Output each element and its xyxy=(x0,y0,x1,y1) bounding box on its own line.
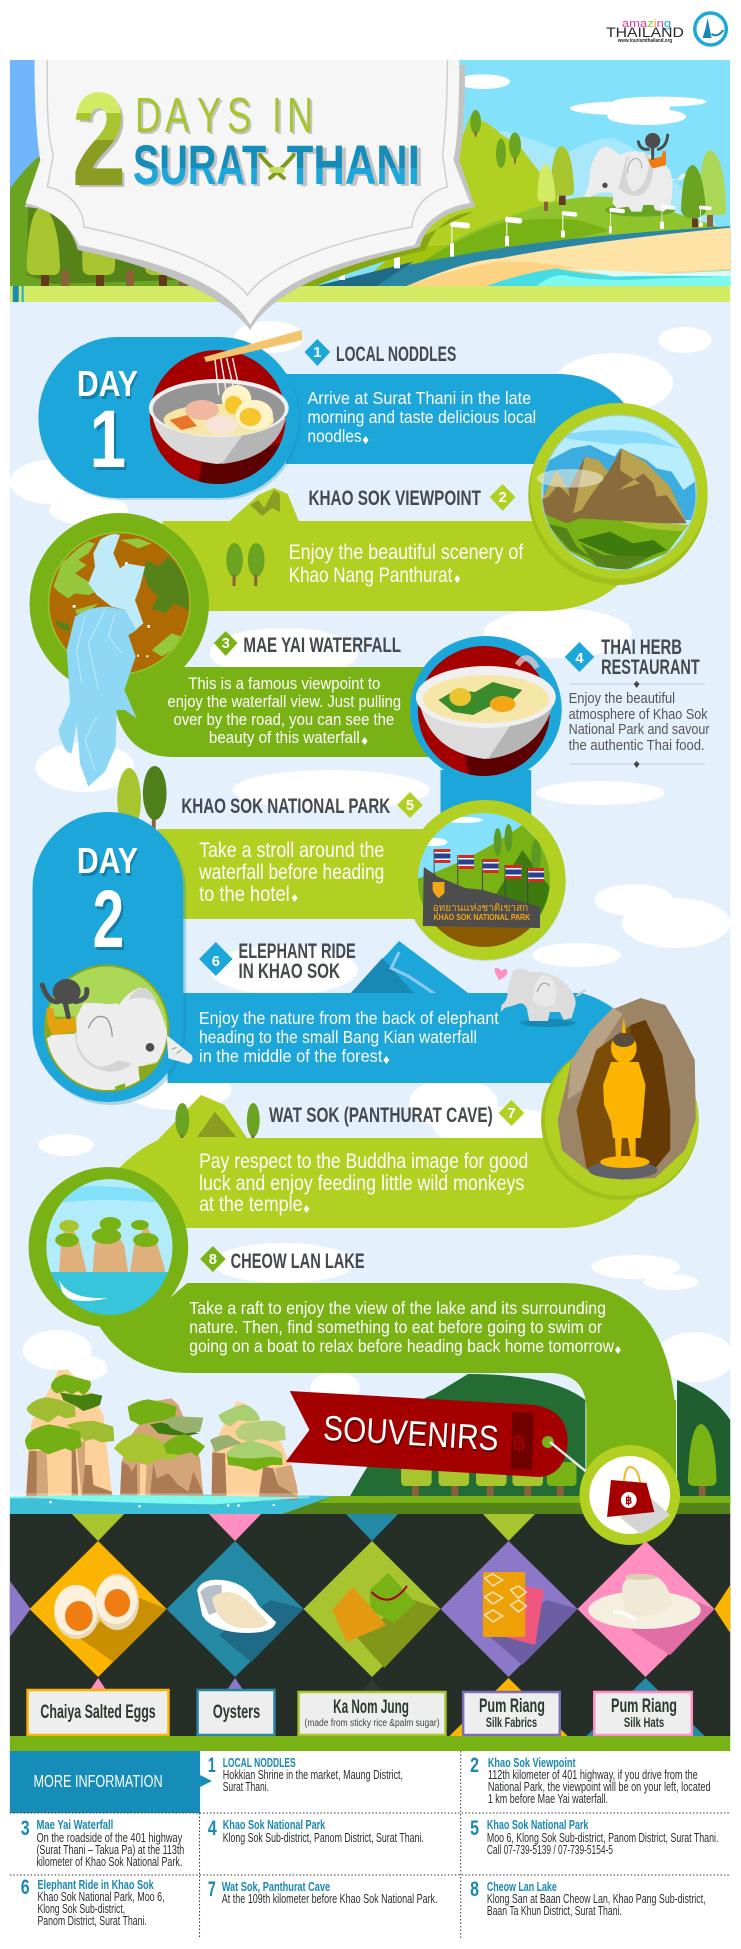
body text 2: Khao Nang Panthurat xyxy=(289,564,453,587)
panel: day 2: DAY xyxy=(80,844,139,884)
panel: day 1 xyxy=(38,337,301,500)
icon: trees above day 2 xyxy=(117,766,167,833)
label: chaiya salted eggs xyxy=(28,1690,169,1735)
haze and surf xyxy=(10,1493,310,1498)
souvenir: pum riang silk hats xyxy=(578,1541,714,1677)
body text 5 xyxy=(198,839,384,906)
body text 2: Enjoy the beautiful scenery of xyxy=(289,541,523,564)
trees xyxy=(470,110,726,227)
info 6: Klong Sok Sub-district, xyxy=(37,1902,125,1916)
logo: amazing thailand: THAILAND xyxy=(606,24,684,40)
buddha statue xyxy=(600,1017,649,1168)
lime hill xyxy=(424,116,559,246)
panel: day 1: DAY xyxy=(77,364,138,404)
label: silk fabrics xyxy=(463,1692,560,1735)
logo: amazing thailand xyxy=(606,18,684,44)
info 5: Khao Sok National Park xyxy=(487,1817,589,1832)
body text 7: luck and enjoy feeding little wild monkeys xyxy=(199,1172,524,1195)
label: ka nom jung: (made from sticky rice &palm sugar) xyxy=(305,1718,440,1729)
logo: round seal xyxy=(695,13,726,45)
label: silk fabrics: Silk Fabrics xyxy=(486,1714,537,1730)
shield title panel xyxy=(25,60,475,330)
info 7: At the 109th kilometer before Khao Sok National Park. xyxy=(222,1892,438,1906)
info grid lines xyxy=(10,1751,730,1938)
label: oysters: Oysters xyxy=(213,1701,260,1722)
label: ka nom jung xyxy=(299,1692,445,1735)
title: 2 days in surat thani: SURAT xyxy=(136,136,269,198)
info 8 xyxy=(470,1878,706,1918)
panel: day 1: 1 xyxy=(90,393,126,485)
icon: shopping bag circle xyxy=(579,1445,680,1545)
panel: day 1: DAY xyxy=(80,367,139,407)
info 3: Mae Yai Waterfall xyxy=(36,1817,113,1832)
body text 5: to the hotel xyxy=(199,883,290,906)
souvenir: oysters xyxy=(167,1541,304,1677)
body text 6: in the middle of the forest xyxy=(199,1046,382,1066)
icon: waterfall circle xyxy=(30,513,209,787)
label: silk fabrics: Pum Riang xyxy=(479,1695,545,1716)
title: 2 days in surat thani: THANI xyxy=(291,136,424,198)
body text 4: atmosphere of Khao Sok xyxy=(569,707,708,723)
info 2: 1 km before Mae Yai waterfall. xyxy=(488,1792,608,1806)
info 7: 7 xyxy=(208,1878,216,1901)
panel: day 2: 2 xyxy=(95,876,126,968)
more information heading xyxy=(10,1751,212,1813)
body text 8: nature. Then, find something to eat before going to swim or xyxy=(189,1317,602,1337)
icon: crossed swords xyxy=(260,155,294,178)
panel: day 2 xyxy=(33,812,186,1105)
heading 4: THAI HERB xyxy=(601,636,682,659)
icon: national park sign circle: KHAO SOK NATIONAL PARK xyxy=(434,912,530,922)
info 3: (Surat Thani – Takua Pa) at the 113th xyxy=(36,1843,184,1857)
info 4: Klong Sok Sub-district, Panom District, Surat Thani. xyxy=(223,1831,424,1845)
body text 4 xyxy=(569,681,710,768)
page background xyxy=(10,302,730,1514)
info 5 xyxy=(470,1817,718,1857)
info 8: 8 xyxy=(470,1878,479,1901)
body text 3: beauty of this waterfall xyxy=(209,728,360,747)
heading 4: RESTAURANT xyxy=(601,656,700,679)
clouds in sky xyxy=(457,74,707,125)
icon: noodle bowl xyxy=(149,330,303,500)
info 5: 5 xyxy=(470,1817,479,1840)
heading 2: 2 xyxy=(498,490,507,506)
info 1: 1 xyxy=(208,1754,216,1777)
info 3: kilometer of Khao Sok National Park. xyxy=(36,1855,182,1869)
heading 3: 3 xyxy=(222,636,230,652)
band: khao sok national park xyxy=(158,829,453,919)
info 7: Wat Sok, Panthurat Cave xyxy=(222,1879,330,1894)
panel: day 2: DAY xyxy=(77,841,138,881)
band: wat sok xyxy=(108,1095,646,1228)
info 6: 6 xyxy=(21,1876,30,1899)
band under header xyxy=(10,286,730,302)
icon: limestone rocks xyxy=(10,1370,310,1507)
body text 6: heading to the small Bang Kian waterfall xyxy=(199,1027,477,1047)
label: chaiya salted eggs: Chaiya Salted Eggs xyxy=(40,1701,156,1722)
band: mae yai waterfall xyxy=(113,667,463,757)
label: silk hats xyxy=(594,1692,692,1735)
heading 1: LOCAL NODDLES xyxy=(336,343,456,366)
panel: day 1: 1 xyxy=(93,396,128,488)
body text 6 xyxy=(199,1008,499,1066)
souvenirs panel background xyxy=(10,1514,730,1736)
label: silk hats: Silk Hats xyxy=(624,1714,664,1730)
souvenirs tag: ฿ xyxy=(512,1430,526,1455)
info 7 xyxy=(208,1878,438,1906)
heading 5: KHAO SOK NATIONAL PARK xyxy=(181,795,390,818)
icon: national park sign circle: อุทยานแห่งชาติเขาสก xyxy=(433,903,528,914)
right landscape xyxy=(316,74,733,300)
footer green band xyxy=(10,1736,730,1751)
body text 7: at the temple xyxy=(199,1193,303,1216)
body text 4: National Park and savour xyxy=(569,722,710,738)
icon: two trees xyxy=(226,543,265,586)
info 3 xyxy=(21,1817,184,1869)
title: 2 days in surat thani: 2 xyxy=(76,70,128,215)
body text 3: enjoy the waterfall view. Just pulling xyxy=(168,692,401,711)
body text 7: Pay respect to the Buddha image for good xyxy=(199,1150,528,1173)
body text 7 xyxy=(199,1150,528,1216)
info 2: 2 xyxy=(470,1754,479,1777)
icon: small elephant and heart xyxy=(495,968,585,1027)
souvenir: ka nom jung xyxy=(304,1541,441,1677)
info 1: Hokkian Shrine in the market, Maung District, xyxy=(223,1768,403,1782)
mid green hill xyxy=(422,196,730,277)
left landscape xyxy=(10,60,190,286)
rock 1 xyxy=(25,1370,114,1498)
logo: amazing thailand: ama zing xyxy=(622,18,671,30)
souvenirs tag: SOUVENIRS xyxy=(322,1409,500,1459)
icon: mountain circle xyxy=(528,403,708,585)
band: local noodles xyxy=(286,374,624,464)
ground xyxy=(279,1496,730,1515)
info 3: On the roadside of the 401 highway xyxy=(36,1831,183,1845)
heading 8: CHEOW LAN LAKE xyxy=(231,1250,365,1273)
souvenir: pum riang silk fabrics xyxy=(441,1541,578,1677)
body text 8 xyxy=(189,1298,621,1356)
body text 3: This is a famous viewpoint to xyxy=(188,674,380,693)
heading 2: KHAO SOK VIEWPOINT xyxy=(308,487,481,510)
heading 4 xyxy=(565,636,700,679)
info 1: LOCAL NODDLES xyxy=(223,1755,296,1770)
connector: blue column xyxy=(441,770,531,830)
info 2 xyxy=(470,1754,711,1806)
body text 8: Take a raft to enjoy the view of the lake and its surrounding xyxy=(189,1298,606,1318)
logo: amazing thailand: www.tourismthailand.org xyxy=(617,38,672,44)
heading 1 xyxy=(305,339,456,366)
label: oysters xyxy=(198,1690,274,1735)
body text 1 xyxy=(307,388,536,446)
panel: day 2: 2 xyxy=(93,873,124,965)
info 1: Surat Thani. xyxy=(223,1780,269,1794)
body text 3: over by the road, you can see the xyxy=(173,710,394,729)
body text 4: the authentic Thai food. xyxy=(569,738,705,754)
icon: cave and buddha circle xyxy=(541,998,699,1200)
souvenir: chaiya salted eggs xyxy=(30,1541,167,1677)
info 6: Panom District, Surat Thani. xyxy=(37,1914,147,1928)
rock 2 xyxy=(114,1398,205,1498)
heading 1: 1 xyxy=(313,345,321,361)
body text 5: waterfall before heading xyxy=(198,861,384,884)
heading 4: 4 xyxy=(575,651,584,667)
title: 2 days in surat thani: SURAT xyxy=(133,134,266,196)
heading 7: 7 xyxy=(507,1106,516,1122)
icon: shopping bag circle: ฿ xyxy=(625,1495,632,1507)
decorative triangles xyxy=(10,1514,730,1736)
info 4: Khao Sok National Park xyxy=(223,1817,326,1832)
band accents xyxy=(13,286,24,302)
heading 6: 6 xyxy=(212,954,220,970)
icon: lake circle xyxy=(29,1167,188,1327)
band: cheow lan lake with vertical run xyxy=(99,1283,676,1510)
icon: elephant in day 2 xyxy=(42,965,192,1093)
more information heading: MORE INFORMATION xyxy=(34,1771,163,1791)
info 6 xyxy=(21,1876,165,1928)
body text 1: Arrive at Surat Thani in the late xyxy=(307,388,531,408)
info 6: Elephant Ride in Khao Sok xyxy=(37,1877,154,1892)
background clouds xyxy=(10,321,734,1404)
title: 2 days in surat thani: DAYS IN xyxy=(135,89,313,143)
title: 2 days in surat thani: DAYS IN xyxy=(137,91,315,145)
lake water xyxy=(10,1494,333,1515)
title: 2 days in surat thani: 2 xyxy=(73,67,125,212)
info 3: 3 xyxy=(21,1817,30,1840)
title: 2 days in surat thani: THANI xyxy=(287,134,420,196)
body text 1: morning and taste delicious local xyxy=(307,407,536,427)
flags xyxy=(434,849,544,904)
band: khao sok viewpoint xyxy=(163,488,624,611)
title: 2 days in surat thani xyxy=(73,67,424,215)
label: ka nom jung: Ka Nom Jung xyxy=(333,1696,409,1717)
info 8: Baan Ta Khun District, Surat Thani. xyxy=(487,1904,622,1918)
heading 7: WAT SOK (PANTHURAT CAVE) xyxy=(269,1104,493,1127)
heading 6: IN KHAO SOK xyxy=(238,960,340,983)
heading 6: ELEPHANT RIDE xyxy=(238,940,356,963)
icon: herb soup bowl xyxy=(410,636,562,790)
info 6: Khao Sok National Park, Moo 6, xyxy=(37,1890,165,1904)
info 1 xyxy=(208,1754,403,1794)
heading 8 xyxy=(200,1246,365,1273)
header landscape scene xyxy=(10,60,733,300)
heading 5: 5 xyxy=(406,798,414,814)
body text 4: Enjoy the beautiful xyxy=(569,691,675,707)
heading 8: 8 xyxy=(209,1252,217,1268)
info 5: Call 07-739-5139 / 07-739-5154-5 xyxy=(487,1843,613,1857)
souvenirs tag xyxy=(286,1391,605,1487)
body text 8: going on a boat to relax before heading back home tomorrow xyxy=(189,1336,614,1356)
info 4 xyxy=(208,1817,424,1845)
body text 6: Enjoy the nature from the back of elephant xyxy=(199,1008,499,1028)
heading 3: MAE YAI WATERFALL xyxy=(243,634,401,657)
info 4: 4 xyxy=(208,1817,217,1840)
body text 2 xyxy=(289,541,523,587)
heading 6 xyxy=(199,940,356,983)
rock 3 xyxy=(210,1402,298,1500)
label: silk hats: Pum Riang xyxy=(611,1695,677,1716)
elephant and rider xyxy=(583,133,685,217)
icon: national park sign circle xyxy=(404,800,566,961)
info 2: Khao Sok Viewpoint xyxy=(488,1755,576,1770)
info 8: Cheow Lan Lake xyxy=(487,1879,557,1894)
band: elephant ride xyxy=(168,941,621,1083)
body text 1: noodles xyxy=(307,426,362,446)
body text 3 xyxy=(168,674,401,747)
souvenir hill scene xyxy=(348,1374,730,1500)
lamp posts xyxy=(339,205,712,280)
road, sand and sea xyxy=(316,226,733,287)
heading 3 xyxy=(214,631,401,657)
body text 5: Take a stroll around the xyxy=(199,839,384,862)
souvenirs tag: SOUVENIRS xyxy=(323,1412,500,1461)
vertical green strip over hill xyxy=(586,1400,676,1500)
light distant hills xyxy=(500,130,718,227)
